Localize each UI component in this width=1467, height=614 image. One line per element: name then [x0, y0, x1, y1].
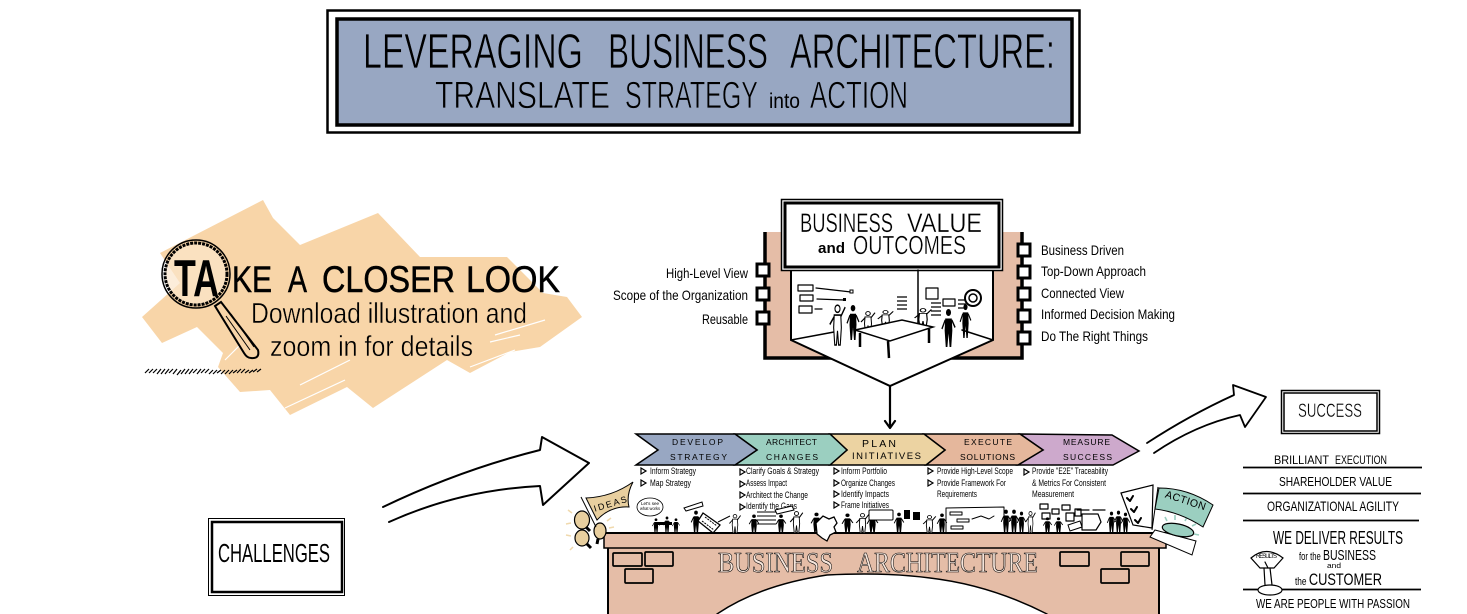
brush stroke background [142, 200, 582, 415]
chevron: architect changes: ARCHITECT [766, 437, 817, 447]
list: execute solutions: Requirements [937, 489, 977, 499]
title: subheading: ACTION [810, 75, 908, 117]
header box: OUTCOMES [853, 230, 966, 260]
list: architect changes: Assess Impact [746, 478, 787, 488]
title: main heading [363, 25, 1055, 79]
list: measure success: Measurement [1032, 489, 1074, 499]
icon: magnifying glass [162, 240, 258, 358]
bridge label: BUSINESS [718, 548, 833, 579]
arrow: challenges to business architecture [383, 437, 589, 522]
connector squares left [757, 264, 769, 324]
list: architect changes: Clarify Goals & Strategy [746, 466, 819, 476]
bridge label: ARCHITECTURE [857, 548, 1038, 579]
right characteristics list: Do The Right Things [1041, 328, 1148, 344]
list: execute solutions: Provide Framework For [937, 478, 1006, 488]
chevron: measure success: MEASURE [1063, 437, 1110, 447]
callout heading: KE [232, 259, 272, 300]
bricks [613, 552, 1149, 583]
outcome: brilliant execution: BRILLIANT [1274, 453, 1330, 467]
chevron: architect changes [735, 434, 847, 465]
list: plan initiatives: Frame Initiatives [841, 500, 889, 510]
header box [782, 200, 1002, 270]
list: success outcomes [1243, 453, 1422, 590]
right characteristics list: Informed Decision Making [1041, 306, 1175, 322]
callout: take a closer look [142, 200, 582, 415]
illustration: meeting room [791, 270, 993, 358]
title: subheading: STRATEGY [625, 75, 758, 117]
flag [1152, 487, 1158, 530]
bridge label [718, 548, 1038, 579]
we deliver results block: WE ARE PEOPLE WITH PASSION [1256, 596, 1410, 611]
outcome: shareholder value: SHAREHOLDER VALUE [1279, 474, 1392, 489]
we deliver results block [1251, 528, 1410, 611]
list: plan initiatives: Organize Changes [841, 478, 895, 488]
icon: magnifying glass: TA [174, 250, 219, 308]
callout text line 1: Download illustration and [251, 298, 527, 330]
speech bubble: Let's see [641, 501, 659, 506]
title: main heading: ARCHITECTURE: [790, 25, 1055, 79]
list: measure success: Provide "E2E" Traceability [1032, 466, 1108, 476]
button [1150, 530, 1196, 555]
list: plan initiatives: Inform Portfolio [841, 466, 887, 476]
chevron: execute solutions: EXECUTE [964, 437, 1012, 447]
callout heading [232, 259, 560, 300]
ideas flag with light bulbs: IDEAS [593, 494, 628, 514]
arrow: process to success [1147, 385, 1266, 453]
callout heading: LOOK [466, 259, 560, 300]
title: main heading: LEVERAGING [363, 25, 583, 79]
panel background [765, 232, 1022, 358]
ideas flag with light bulbs [566, 482, 633, 550]
bridge: business architecture [604, 533, 1166, 614]
right characteristics list: Top-Down Approach [1041, 263, 1146, 279]
callout text line 2: zoom in for details [270, 331, 473, 363]
list: execute solutions [928, 466, 1013, 499]
chevron: measure success: SUCCESS [1063, 452, 1112, 462]
illustration: people working on the bridge [652, 502, 1130, 541]
chevron: plan initiatives: INITIATIVES [852, 451, 921, 462]
list: architect changes: Identify the Gaps [746, 501, 797, 511]
icon: results scale [1251, 552, 1283, 595]
chevron: develop strategy [636, 434, 757, 465]
outcome: organizational agility: ORGANIZATIONAL AGILITY [1267, 498, 1399, 514]
list: plan initiatives: Identify Impacts [841, 489, 889, 499]
left characteristics list [613, 265, 749, 327]
speech bubble: what works [640, 506, 661, 511]
list: measure success [1024, 466, 1108, 499]
outcome: brilliant execution: EXECUTION [1335, 453, 1387, 467]
connector squares right [1018, 244, 1030, 344]
bridge top beam [604, 533, 1166, 548]
list: architect changes [740, 466, 819, 511]
header box: VALUE [907, 208, 982, 238]
list: execute solutions: Provide High-Level Scope [937, 466, 1013, 476]
arrow: value down to process [885, 386, 895, 428]
right characteristics list: Business Driven [1041, 242, 1124, 258]
left characteristics list: High-Level View [666, 265, 749, 281]
list: develop strategy: Inform Strategy [650, 466, 696, 476]
challenges box: CHALLENGES [218, 538, 330, 568]
panel: business value and outcomes [613, 200, 1175, 386]
icon: light bulbs [566, 510, 614, 550]
success box [1282, 390, 1380, 434]
outcome: brilliant execution [1274, 453, 1387, 467]
success box: SUCCESS [1298, 401, 1362, 422]
left characteristics list: Reusable [702, 311, 748, 327]
right characteristics list: Connected View [1041, 285, 1125, 301]
chevron: plan initiatives: PLAN [862, 438, 896, 450]
header box: BUSINESS [800, 208, 893, 238]
bridge body with arch [608, 546, 1159, 614]
we deliver results block: WE DELIVER RESULTS [1273, 528, 1403, 548]
we deliver results block: the CUSTOMER [1295, 570, 1382, 589]
chevron: execute solutions [924, 434, 1043, 465]
icon: hatched shadow [145, 369, 261, 375]
icon: results scale: RESULTS [1256, 554, 1277, 560]
pointed room [791, 268, 993, 386]
we deliver results block: for the BUSINESS [1299, 547, 1376, 564]
title banner [328, 10, 1080, 132]
chevron: develop strategy: DEVELOP [672, 437, 723, 447]
list: plan initiatives [834, 466, 895, 510]
list: architect changes: Architect the Change [746, 490, 808, 500]
checklist pennant [1121, 485, 1153, 528]
chevron: plan initiatives [830, 434, 945, 465]
list: develop strategy: Map Strategy [650, 478, 691, 488]
title: main heading: BUSINESS [608, 25, 768, 79]
speech bubble [637, 498, 663, 516]
list: develop strategy [641, 466, 696, 488]
right characteristics list [1041, 242, 1175, 344]
chevron: execute solutions: SOLUTIONS [960, 452, 1015, 462]
chevron: develop strategy: STRATEGY [670, 452, 727, 462]
title: subheading: into [769, 90, 800, 113]
flag [581, 497, 596, 527]
list: measure success: & Metrics For Consistent [1032, 478, 1106, 488]
process chevrons [636, 434, 1139, 465]
header box: and [818, 240, 845, 257]
we deliver results block: and [1327, 563, 1341, 570]
action flag with button: ACTION [1164, 489, 1207, 513]
challenges box [208, 518, 344, 596]
title: subheading [435, 75, 908, 117]
chevron: measure success [1018, 434, 1139, 465]
callout heading: CLOSER [322, 259, 455, 300]
action flag with button [1150, 487, 1213, 555]
title: subheading: TRANSLATE [435, 75, 610, 117]
chevron: architect changes: CHANGES [766, 452, 818, 462]
left characteristics list: Scope of the Organization [613, 287, 748, 303]
callout heading: A [288, 259, 307, 300]
